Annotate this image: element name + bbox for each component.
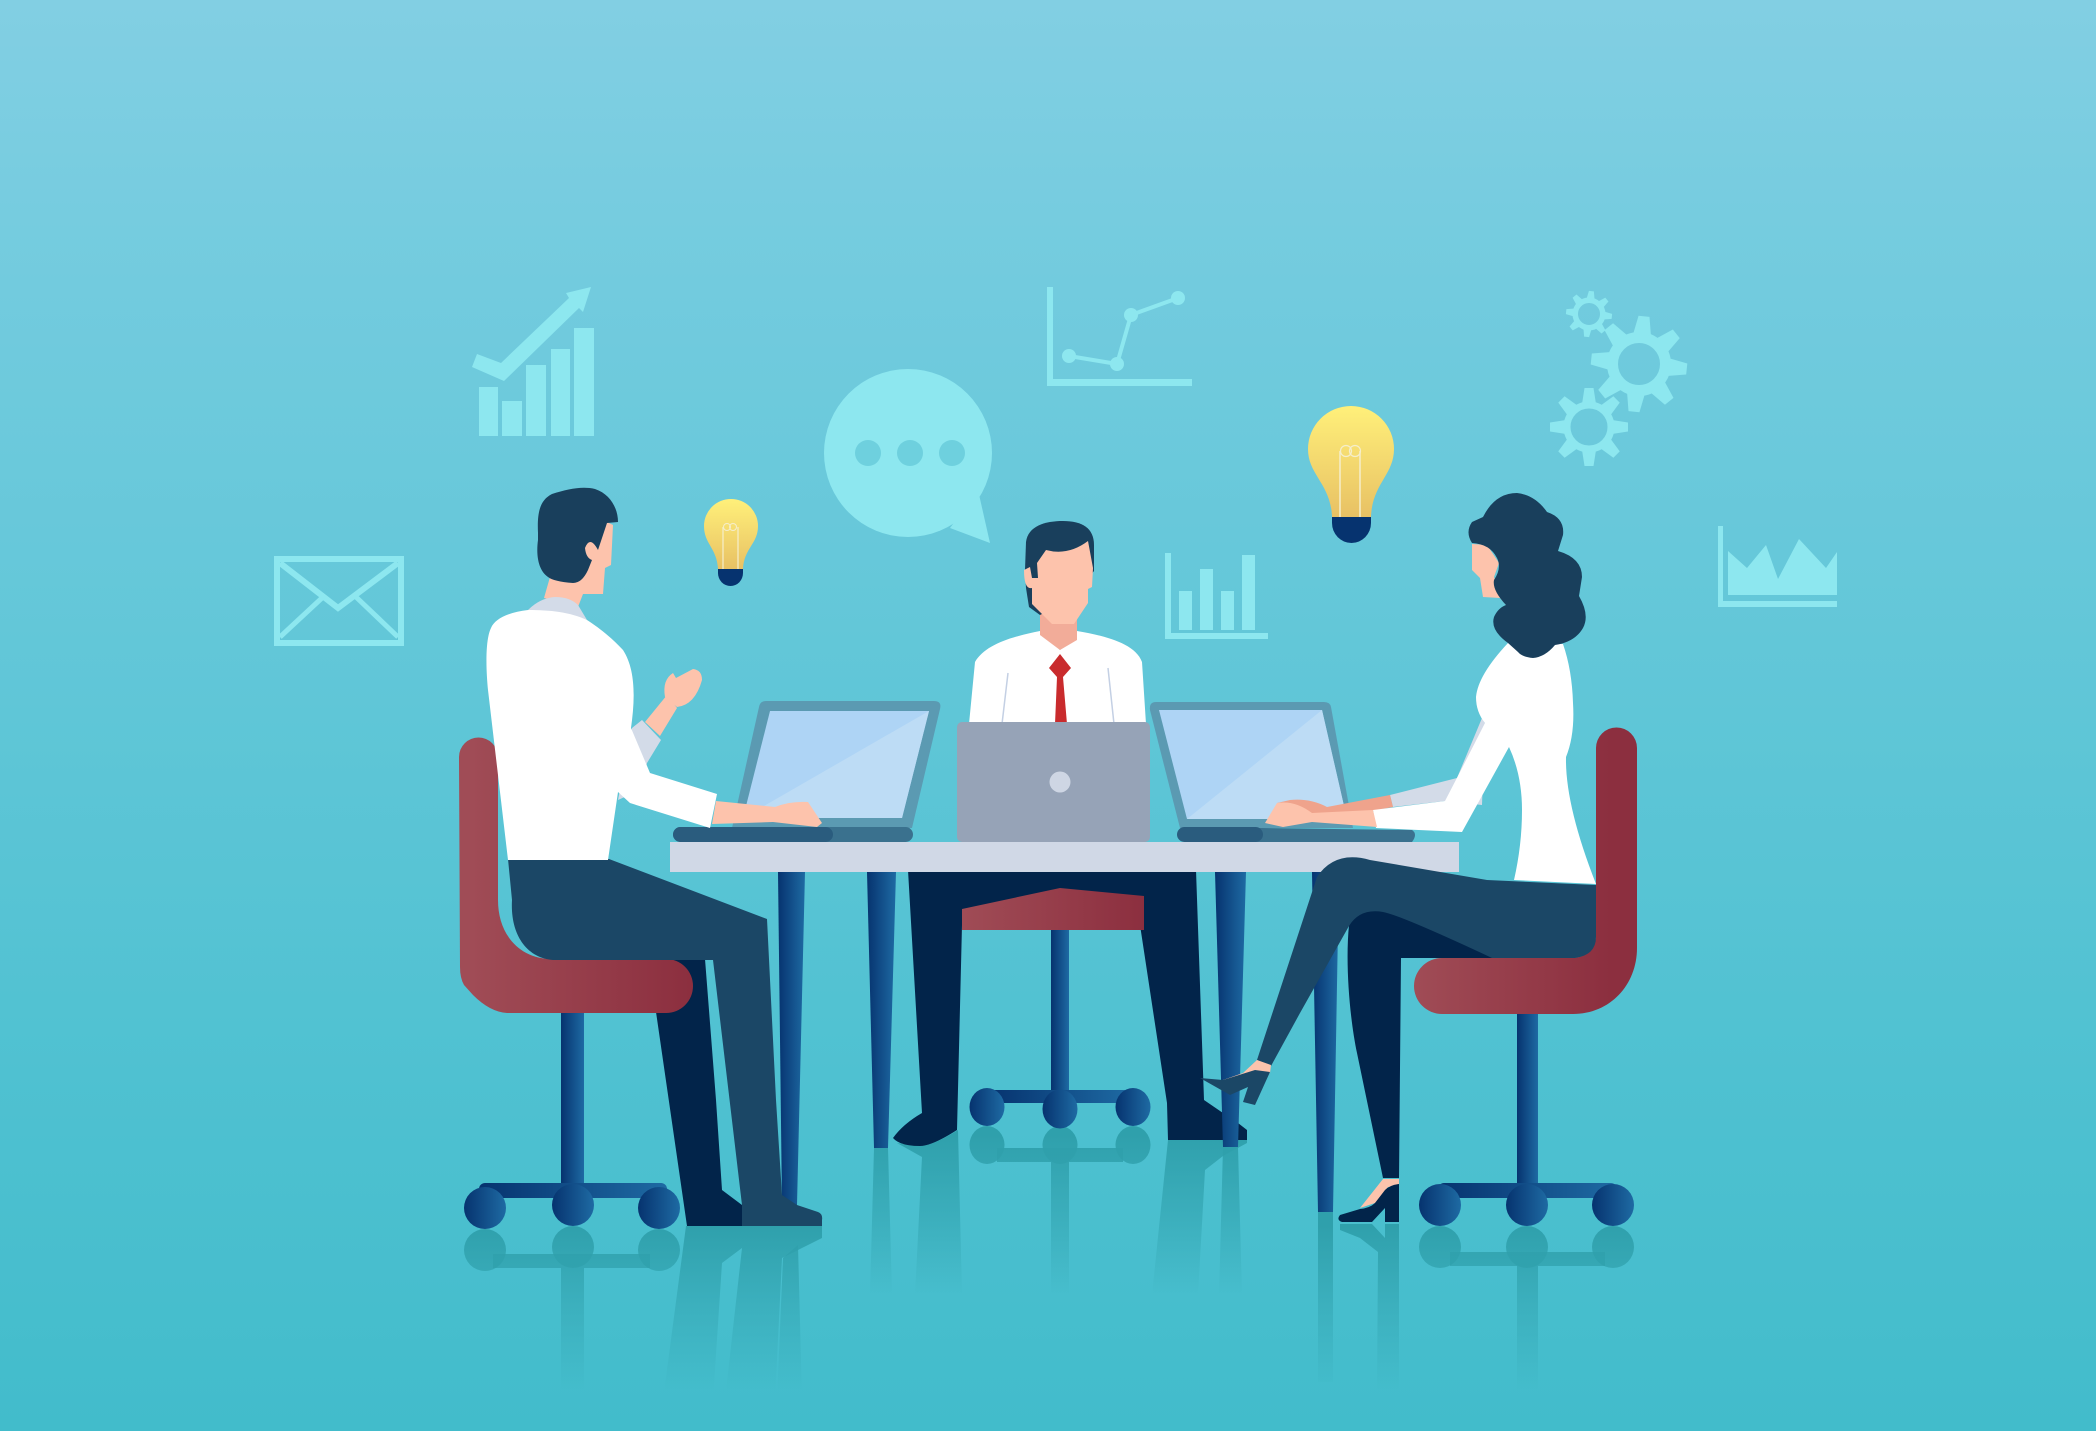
shoe — [1338, 1184, 1399, 1222]
chair — [1414, 728, 1637, 1014]
floor reflections — [464, 1126, 1634, 1400]
shirt folds — [1002, 668, 1114, 724]
chair post — [1051, 930, 1069, 1092]
laptop: centre — [957, 722, 1150, 842]
person: left man with chair — [459, 488, 822, 1229]
icon: small light bulb — [704, 499, 758, 586]
trousers and front leg — [508, 859, 822, 1226]
icon: large light bulb — [1308, 406, 1394, 543]
front forearm and hand — [1265, 802, 1377, 827]
neck — [1040, 605, 1077, 650]
front leg and trousers — [1257, 857, 1596, 1066]
front shoe — [1200, 1070, 1270, 1105]
raised hand — [664, 669, 702, 707]
chair base — [1419, 1183, 1634, 1226]
chair — [459, 738, 693, 1013]
shirt — [486, 610, 717, 860]
tie — [1049, 654, 1071, 724]
back forearm and hand — [1277, 795, 1393, 822]
table top — [670, 842, 1459, 872]
icon: envelope — [277, 559, 401, 643]
hair — [1468, 493, 1586, 658]
icon: growth bar chart with arrow — [472, 287, 594, 436]
chair base — [464, 1183, 680, 1229]
face — [1472, 544, 1506, 605]
floating icons — [277, 287, 1837, 643]
laptop: right — [1150, 702, 1415, 842]
neck and face — [544, 522, 613, 607]
collar — [528, 597, 587, 620]
back leg — [655, 959, 742, 1226]
chair seat — [962, 888, 1144, 930]
icon: area chart — [1718, 526, 1837, 607]
trousers — [893, 870, 1247, 1146]
person: right woman with chair — [1200, 493, 1637, 1226]
hair — [1025, 521, 1094, 615]
person: centre man with chair — [893, 521, 1247, 1146]
icon: line chart — [1047, 287, 1192, 386]
chair post — [561, 1013, 584, 1185]
raised forearm — [645, 695, 677, 736]
icon: small bar chart — [1165, 553, 1268, 639]
hair — [537, 488, 618, 583]
table legs — [778, 872, 1339, 1212]
chair post — [1517, 1014, 1538, 1185]
front foot skin — [1223, 1060, 1271, 1085]
face — [1024, 541, 1093, 624]
resting forearm and hand — [712, 801, 822, 827]
chair base — [970, 1088, 1150, 1128]
back leg — [1348, 905, 1500, 1178]
sleeve cuff — [618, 720, 661, 800]
reflection: centre chair and legs — [870, 1126, 1247, 1295]
laptop: left — [673, 701, 940, 842]
reflection: left and right chairs and legs — [464, 1212, 1634, 1400]
icon: speech bubble — [824, 369, 992, 543]
shirt — [1373, 643, 1596, 884]
shirt — [969, 631, 1146, 724]
back arm and sleeve — [1390, 718, 1485, 807]
ankle — [1360, 1179, 1399, 1208]
icon: gears — [1550, 289, 1692, 466]
